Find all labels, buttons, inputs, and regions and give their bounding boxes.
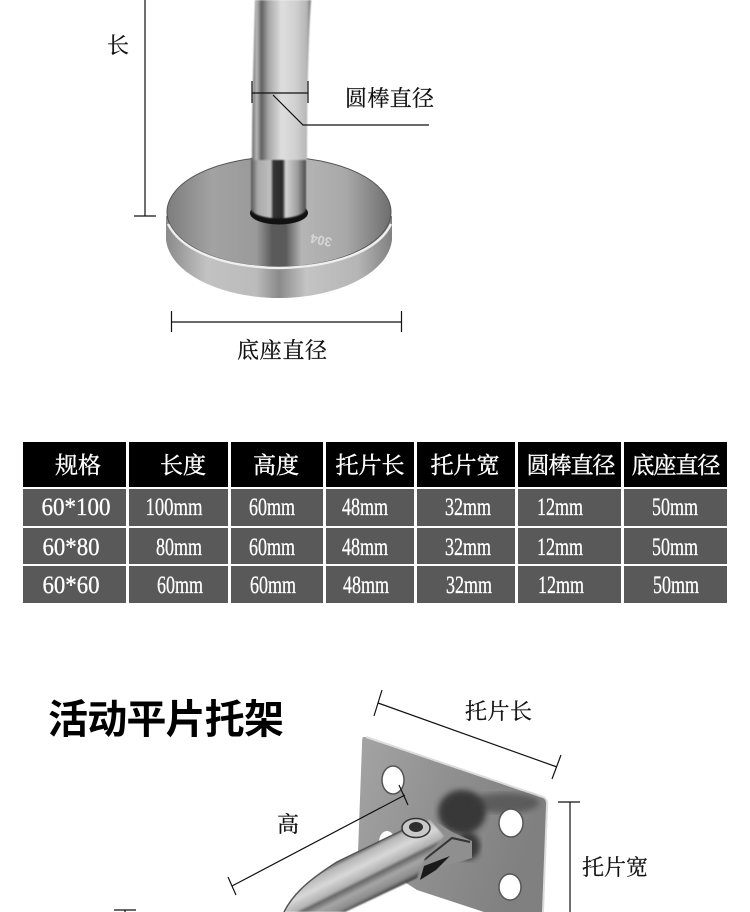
table row 60*60: 60mm — [250, 572, 296, 599]
table row 60*100: 60mm — [249, 494, 295, 521]
plate — [358, 737, 547, 912]
table row 60*80 — [23, 528, 727, 564]
table row 60*80: 60*80 — [42, 534, 100, 561]
table row 60*100: 100mm — [146, 494, 203, 521]
dimension: plate length — [374, 690, 561, 779]
dimension: lower left tick — [114, 910, 136, 912]
table row 60*80: 12mm — [537, 534, 583, 561]
table row 60*60: 12mm — [538, 572, 584, 599]
dimension: length: 长 — [107, 33, 129, 58]
dimension: plate length: 托片长 — [465, 699, 532, 724]
table row 60*80: 32mm — [445, 534, 491, 561]
bolt — [402, 818, 430, 838]
dimension: rod diameter — [252, 81, 434, 125]
table header row: 托片长 — [336, 453, 404, 478]
photo: flat plate bracket — [284, 737, 547, 912]
table row 60*100: 60*100 — [42, 494, 110, 521]
table row 60*80: 48mm — [342, 534, 388, 561]
table header row: 圆棒直径 — [526, 453, 616, 478]
dimension: length — [107, 0, 156, 216]
dimension: plate width: 托片宽 — [582, 855, 648, 880]
table header row: 长度 — [160, 453, 206, 478]
dimension: base diameter — [171, 311, 402, 363]
table row 60*80: 80mm — [156, 534, 202, 561]
table row 60*60: 48mm — [343, 572, 389, 599]
table header row — [23, 442, 727, 487]
table row 60*60: 50mm — [653, 572, 699, 599]
table header row: 规格 — [55, 453, 101, 478]
dimension: height: 高 — [277, 812, 299, 837]
engraved mark: 304 — [308, 231, 333, 250]
table row 60*100: 12mm — [537, 494, 583, 521]
table header row: 高度 — [253, 453, 299, 478]
table row 60*80: 50mm — [652, 534, 698, 561]
table row 60*100: 32mm — [445, 494, 491, 521]
mounting holes — [382, 766, 404, 794]
photo: round rod and base — [166, 0, 392, 298]
table header row: 托片宽 — [430, 453, 500, 478]
clamp jaw — [400, 818, 472, 884]
dimension: height — [228, 785, 408, 895]
table row 60*60 — [23, 566, 727, 603]
table row 60*60: 60mm — [157, 572, 203, 599]
table row 60*60: 60*60 — [42, 572, 100, 599]
tube arm — [284, 820, 444, 912]
dimension: rod diameter: 圆棒直径 — [345, 86, 434, 111]
spec table — [23, 442, 727, 603]
title: 活动平片托架 — [48, 698, 284, 742]
dimension: plate width — [558, 802, 648, 912]
table row 60*80: 60mm — [249, 534, 295, 561]
table row 60*60: 32mm — [446, 572, 492, 599]
weld burn marks — [438, 790, 486, 834]
table row 60*100 — [23, 489, 727, 526]
table row 60*100: 48mm — [342, 494, 388, 521]
dimension: base diameter: 底座直径 — [237, 338, 327, 363]
table header row: 底座直径 — [632, 453, 720, 478]
table row 60*100: 50mm — [652, 494, 698, 521]
